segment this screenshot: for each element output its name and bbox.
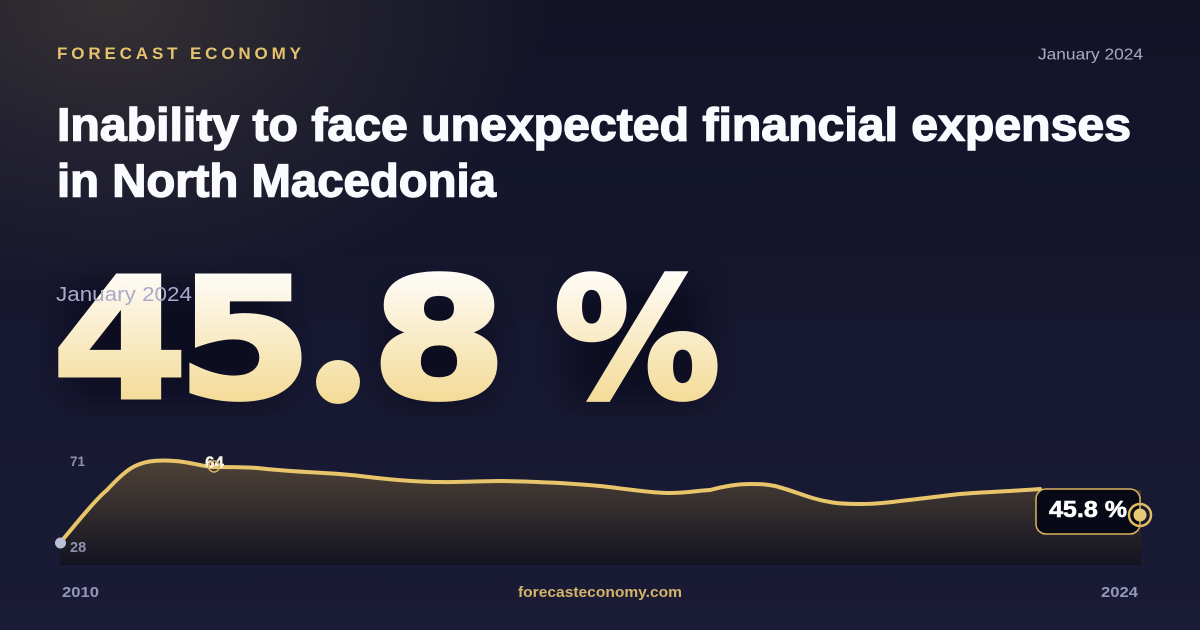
title [57,98,1131,206]
current point marker [1129,504,1151,526]
hero value: % [554,244,720,437]
hero value: . [324,339,351,409]
chart line [60,460,1040,543]
current value callout [1036,489,1140,534]
start year: 2010 [62,584,99,601]
peak value label: 64 [205,453,224,472]
peak ring marker [208,461,220,472]
hero value: 8 [372,243,506,437]
brand eyebrow: FORECAST ECONOMY [57,44,302,63]
area chart [55,453,1151,565]
start point marker [55,538,66,548]
end year: 2024 [1101,584,1139,601]
hero value [53,243,720,437]
chart area fill [60,460,1141,565]
date over hero value: January 2024 [56,284,192,306]
hero value: 4 [53,243,187,437]
title: Inability to face unexpected financial expenses [57,98,1131,150]
date top right: January 2024 [1038,46,1143,64]
hero value: 5 [177,243,312,437]
axis min label: 28 [70,540,86,556]
current value callout: 45.8 % [1049,496,1127,522]
axis max label: 71 [70,454,86,469]
title: in North Macedonia [57,154,496,206]
site url: forecasteconomy.com [518,584,682,601]
hero shadow [70,285,705,400]
